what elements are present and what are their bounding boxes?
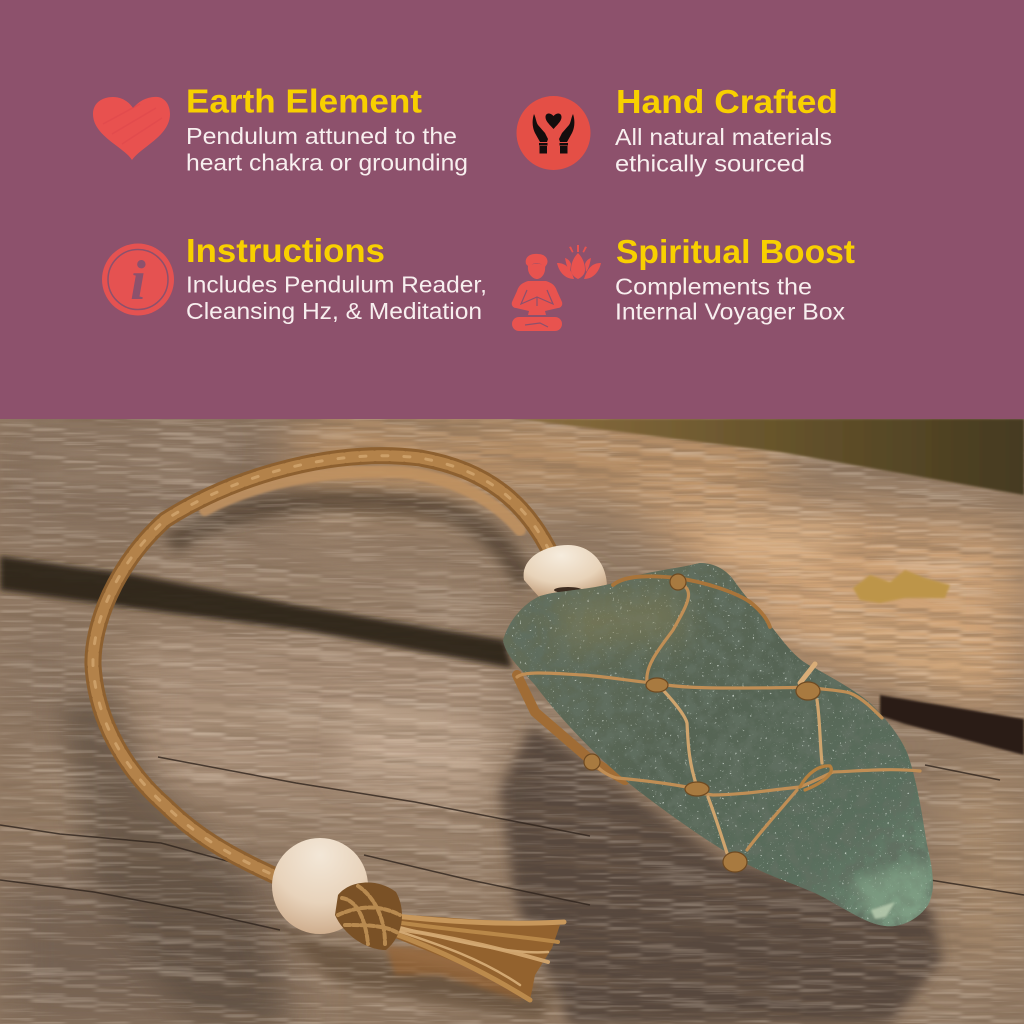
text: instructions description: Cleansing Hz, & Meditation (186, 298, 482, 324)
heading: spiritual boost: Spiritual Boost (616, 233, 855, 270)
braided cord (93, 456, 548, 878)
text: earth element description: Pendulum attuned to the (186, 123, 457, 149)
text: spiritual boost description: Internal Voyager Box (615, 298, 845, 324)
feature: earth element (93, 82, 468, 176)
icon: heart (93, 97, 170, 160)
text: instructions description: Includes Pendulum Reader, (186, 272, 487, 298)
tassel (390, 914, 564, 1000)
net cords and knots (517, 574, 920, 872)
wood cracks (0, 757, 1024, 930)
lower bead (272, 838, 368, 934)
grain texture (0, 419, 1024, 1024)
green stone (500, 560, 940, 930)
feature: instructions (102, 232, 487, 324)
distant background corner (520, 419, 1024, 495)
tassel shadow (385, 945, 535, 1000)
icon: information circle (102, 244, 174, 316)
wood planks (0, 419, 1024, 1024)
heading: hand crafted: Hand Crafted (616, 83, 838, 120)
text: hand crafted description: All natural materials (615, 124, 832, 150)
photo: stone pendulum on weathered wood (0, 419, 1024, 1024)
upper bead (524, 545, 607, 598)
icon: hands holding heart (516, 96, 590, 170)
dried leaf (853, 570, 950, 603)
cord knot (335, 883, 402, 950)
text: earth element description: heart chakra or grounding (186, 150, 468, 176)
background panel (0, 0, 1024, 419)
sunlit patches (30, 440, 1000, 800)
cast shadows (60, 501, 942, 1024)
heading: instructions: Instructions (186, 232, 385, 269)
plank gap (0, 556, 512, 668)
text: hand crafted description (615, 124, 832, 176)
text: spiritual boost description: Complements the (615, 274, 812, 300)
heading: earth element: Earth Element (186, 82, 422, 120)
text: instructions description (186, 272, 487, 324)
feature: hand crafted (516, 83, 838, 176)
text: spiritual boost description (615, 274, 845, 324)
icon: meditating figure with lotus (512, 245, 601, 331)
text: earth element description (186, 123, 468, 176)
cord wrap behind stone (517, 675, 625, 780)
text: hand crafted description: ethically sourced (615, 150, 805, 176)
feature: spiritual boost (512, 233, 855, 331)
icon: information circle: i (130, 250, 146, 312)
